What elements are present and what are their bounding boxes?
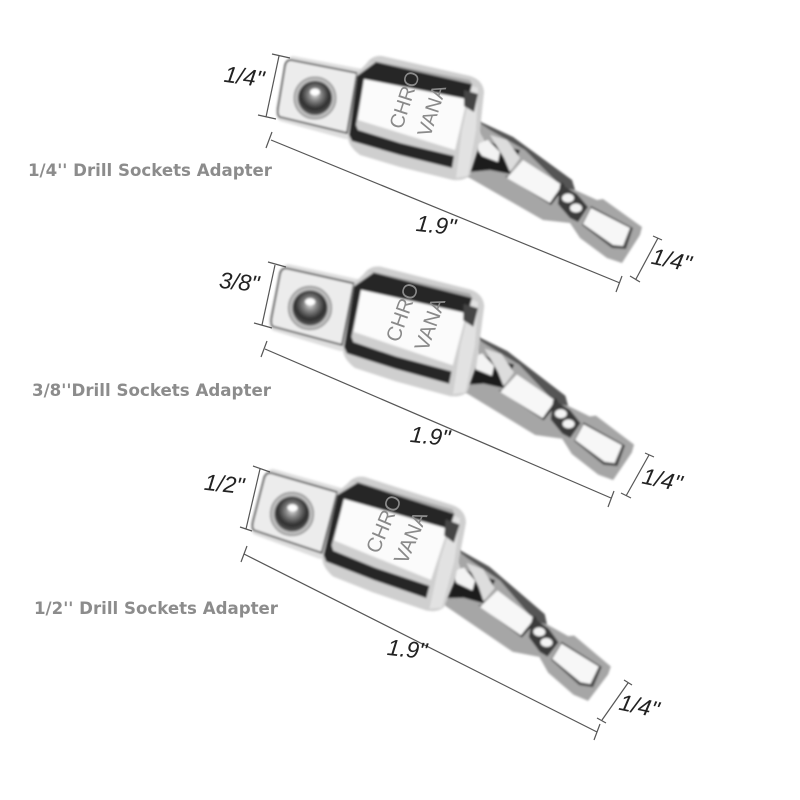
length label: 1.9" — [409, 421, 453, 451]
tool head — [276, 56, 484, 180]
size label: 1/4" — [223, 61, 268, 92]
tool shank — [446, 325, 637, 481]
size dimension line — [258, 54, 290, 119]
caption: 1/2'' Drill Sockets Adapter — [34, 599, 279, 619]
tool head — [267, 264, 485, 397]
adapter 3/8 inch — [32, 262, 686, 507]
adapter 1/4 inch — [28, 54, 696, 292]
size label: 1/2" — [203, 469, 247, 499]
hex label: 1/4" — [649, 243, 696, 277]
size dimension line — [254, 262, 286, 328]
tool shank — [422, 537, 620, 702]
length label: 1.9" — [415, 210, 459, 240]
size label: 3/8" — [218, 267, 262, 297]
length dimension line — [241, 546, 600, 740]
tool shank — [455, 112, 642, 263]
hex dimension line — [621, 453, 654, 498]
hex label: 1/4" — [640, 463, 686, 497]
adapter 1/2 inch — [34, 466, 663, 740]
length dimension line — [266, 132, 622, 292]
size dimension line — [240, 466, 270, 531]
length dimension line — [261, 341, 614, 507]
tool head — [244, 467, 469, 613]
hex dimension line — [630, 236, 662, 282]
length label: 1.9" — [386, 634, 430, 664]
hex dimension line — [597, 680, 632, 723]
hex label: 1/4" — [617, 689, 663, 723]
caption: 3/8''Drill Sockets Adapter — [32, 381, 272, 401]
caption: 1/4'' Drill Sockets Adapter — [28, 161, 273, 181]
